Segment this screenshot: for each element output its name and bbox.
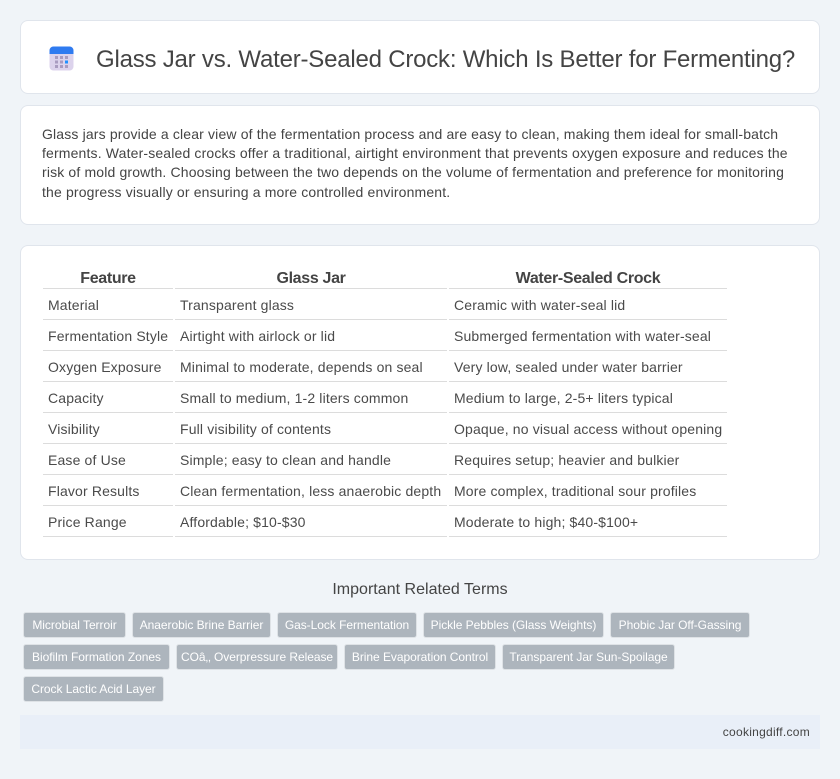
intro text: Glass jars provide a clear view of the fermentation process and are easy to clean, making them ideal for small-batch [42, 126, 778, 142]
comparison table: Ease of Use [48, 452, 126, 468]
comparison table: Ceramic with water-seal lid [454, 297, 625, 313]
related term tags: Anaerobic Brine Barrier [140, 618, 263, 632]
comparison table: Submerged fermentation with water-seal [454, 328, 711, 344]
comparison table: Airtight with airlock or lid [180, 328, 335, 344]
related term tags: Phobic Jar Off-Gassing [619, 618, 741, 632]
related term tags: Brine Evaporation Control [352, 650, 488, 664]
panel: header [20, 20, 820, 94]
intro text: risk of mold growth. Choosing between the two depends on the volume of fermentation and preference for monitoring [42, 164, 784, 180]
comparison table: Visibility [48, 421, 100, 437]
comparison table: Small to medium, 1-2 liters common [180, 390, 408, 406]
related term tags: Microbial Terroir [32, 618, 117, 632]
related term tags: Crock Lactic Acid Layer [31, 682, 156, 696]
comparison table: Glass Jar [276, 270, 346, 287]
comparison table: Price Range [48, 514, 127, 530]
heading: important related terms: Important Related Terms [332, 581, 508, 598]
comparison table: Fermentation Style [48, 328, 168, 344]
footer source: cookingdiff.com [723, 725, 810, 739]
comparison table: Requires setup; heavier and bulkier [454, 452, 680, 468]
comparison table: Moderate to high; $40-$100+ [454, 514, 638, 530]
intro text: the progress visually or ensuring a more controlled environment. [42, 184, 450, 200]
comparison table: Water-Sealed Crock [516, 270, 660, 287]
comparison table: Material [48, 297, 99, 313]
comparison table: Very low, sealed under water barrier [454, 359, 683, 375]
related term tags: Gas-Lock Fermentation [285, 618, 409, 632]
comparison table: Opaque, no visual access without opening [454, 421, 722, 437]
related term tags: Biofilm Formation Zones [32, 650, 161, 664]
intro text [42, 126, 788, 200]
comparison table: Minimal to moderate, depends on seal [180, 359, 423, 375]
comparison table: Simple; easy to clean and handle [180, 452, 391, 468]
comparison table: More complex, traditional sour profiles [454, 483, 696, 499]
comparison table [43, 270, 727, 537]
panel: comparison table [20, 245, 820, 560]
intro text: ferments. Water-sealed crocks offer a traditional, airtight environment that prevents oxygen exposure and reduces the [42, 145, 788, 161]
title: Glass Jar vs. Water-Sealed Crock: Which Is Better for Fermenting? [96, 46, 795, 73]
comparison table: Affordable; $10-$30 [180, 514, 306, 530]
related term tags: COâ‚‚ Overpressure Release [181, 650, 333, 664]
comparison table: Medium to large, 2-5+ liters typical [454, 390, 673, 406]
comparison table: Capacity [48, 390, 104, 406]
comparison table: Flavor Results [48, 483, 140, 499]
related term tags: Pickle Pebbles (Glass Weights) [431, 618, 596, 632]
comparison table: Feature [80, 270, 136, 287]
comparison table: Transparent glass [180, 297, 294, 313]
icon: calendar [50, 46, 74, 70]
related term tags [23, 612, 750, 702]
comparison table: Clean fermentation, less anaerobic depth [180, 483, 441, 499]
footer bar [20, 715, 820, 749]
panel: intro paragraph [20, 105, 820, 225]
comparison table: Oxygen Exposure [48, 359, 162, 375]
related term tags: Transparent Jar Sun-Spoilage [509, 650, 668, 664]
comparison table: Full visibility of contents [180, 421, 331, 437]
